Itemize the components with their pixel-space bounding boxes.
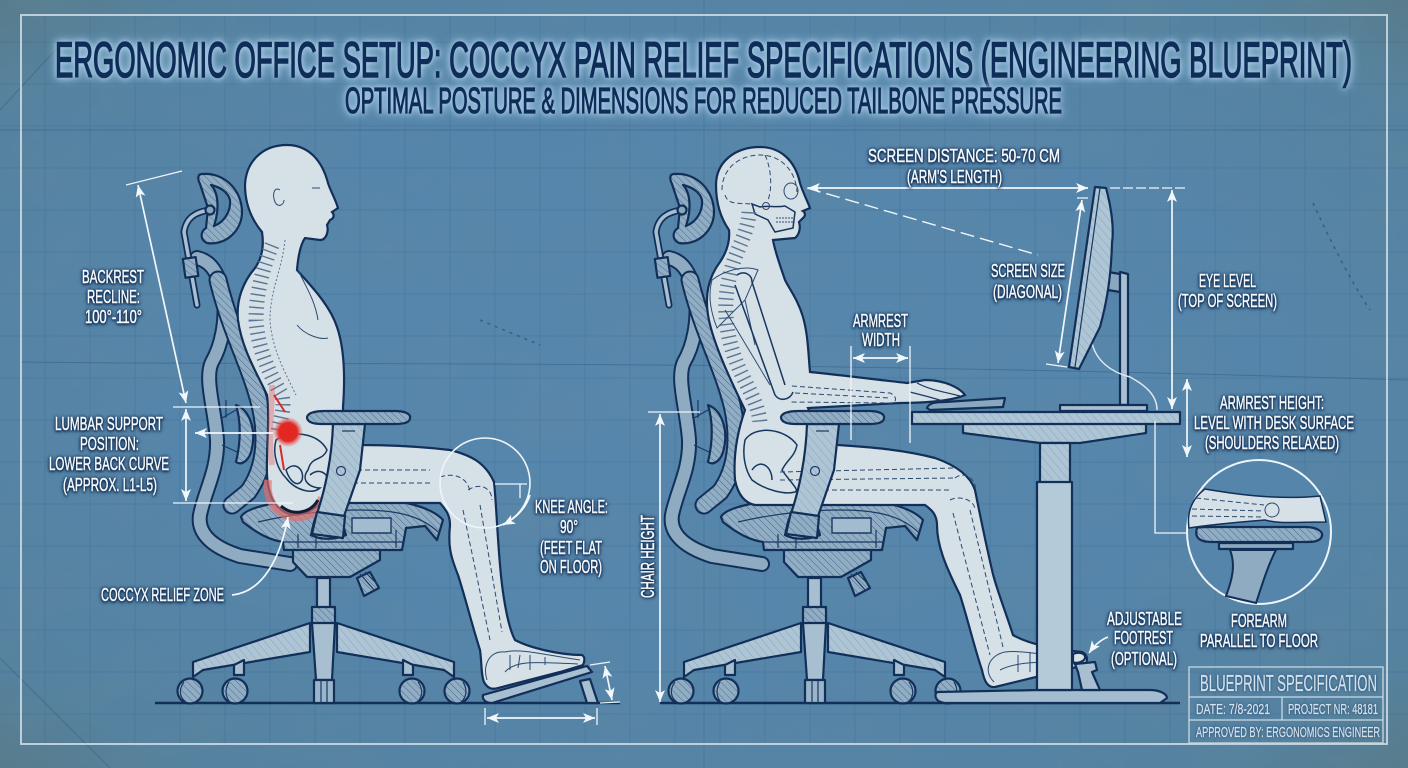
foot bones right [988, 652, 1075, 682]
chair backrest and headrest right [655, 174, 762, 564]
femur lines right [780, 468, 955, 490]
title block: blueprint specification: DATE: 7/8-2021 [1196, 701, 1270, 718]
hand fingers right [910, 383, 960, 402]
body silhouette left [238, 145, 584, 689]
knee and lower leg bones right [950, 475, 1003, 655]
label: screen size: (DIAGONAL) [993, 282, 1062, 302]
chair base left [178, 550, 470, 704]
label: backrest recline: BACKREST [82, 267, 144, 287]
red pain zone left [268, 385, 322, 517]
footrest dimension arrows [485, 662, 620, 725]
label: armrest width: ARMREST [853, 311, 908, 331]
label: lumbar support position: (APPROX. L1-L5) [63, 475, 157, 495]
label: screen distance: (ARM'S LENGTH) [907, 167, 1002, 187]
armrest right [781, 411, 884, 539]
label: forearm parallel: PARALLEL TO FLOOR [1200, 631, 1318, 651]
label: armrest width: WIDTH [862, 330, 900, 350]
label: lumbar support position: LOWER BACK CURVE [49, 454, 169, 474]
lumbar dimension lines [173, 407, 293, 503]
sight line dashed [807, 188, 1038, 255]
body silhouette right [707, 147, 1087, 687]
screen distance arrow [808, 187, 1088, 189]
label: backrest recline: 100°-110° [85, 307, 142, 327]
foot bones left [486, 651, 580, 680]
label: armrest height [1194, 393, 1354, 453]
armrest height arrow [1186, 379, 1188, 457]
chair backrest and headrest left [183, 174, 290, 564]
label: forearm parallel [1200, 611, 1318, 651]
footrest pointer arrow [1089, 637, 1108, 653]
label: chair height: CHAIR HEIGHT [638, 515, 658, 598]
label: armrest width [853, 311, 908, 350]
label: eye level: EYE LEVEL [1199, 271, 1256, 291]
desk top and under-panel [912, 412, 1180, 443]
chair base right [668, 550, 960, 704]
label: lumbar support position: POSITION: [80, 434, 139, 454]
label: adjustable footrest: ADJUSTABLE [1107, 609, 1182, 629]
label: lumbar support position: LUMBAR SUPPORT [55, 414, 163, 434]
label: screen distance [868, 146, 1060, 187]
label: armrest height: ARMREST HEIGHT: [1220, 393, 1324, 413]
label: backrest recline [82, 267, 144, 327]
label: lumbar support position [49, 414, 169, 495]
label: screen size [991, 261, 1065, 302]
armrest width dimension [851, 346, 910, 443]
chair seat left [241, 497, 443, 550]
coccyx pointer arrow [232, 517, 288, 595]
shoulder blade and ribs right [710, 268, 770, 385]
label: knee angle: 90° [560, 517, 578, 537]
connector to forearm detail [1155, 421, 1187, 533]
knee and lower leg bones left [440, 475, 502, 640]
panel: side view posture and chair [49, 145, 620, 725]
label: eye level [1178, 271, 1277, 311]
arm bones right [735, 273, 896, 403]
panel: workstation setup with skeleton [638, 146, 1354, 704]
keyboard [927, 398, 1005, 410]
ear and face details left [274, 188, 328, 338]
label: backrest recline: RECLINE: [87, 287, 140, 307]
eye level dashed reference [1110, 187, 1186, 189]
eye level arrow [1171, 190, 1173, 409]
label: screen distance: SCREEN DISTANCE: 50-70 CM [868, 146, 1060, 166]
label: adjustable footrest: (OPTIONAL) [1111, 649, 1177, 669]
chair seat right [721, 497, 923, 550]
label: coccyx relief zone: COCCYX RELIEF ZONE [101, 585, 224, 605]
armrest left [307, 411, 410, 539]
pelvis and femur left [275, 434, 328, 491]
label: knee angle: (FEET FLAT [540, 538, 602, 558]
forearm detail circle [1187, 460, 1331, 604]
lumbar pointer arrow [195, 432, 273, 434]
skull right [722, 155, 798, 232]
backrest recline dimension arrow [126, 171, 186, 403]
label: knee angle: ON FLOOR) [540, 557, 602, 577]
label: eye level: (TOP OF SCREEN) [1178, 291, 1277, 311]
label: forearm parallel: FOREARM [1231, 611, 1287, 631]
title block: blueprint specification [1189, 667, 1383, 743]
knee angle arrow [503, 495, 530, 525]
label: screen size: SCREEN SIZE [991, 261, 1065, 281]
knee detail circle [440, 438, 530, 528]
label: knee angle [535, 497, 608, 577]
spine left [256, 240, 296, 432]
femur lines left [345, 470, 430, 483]
label: adjustable footrest [1107, 609, 1182, 669]
label: adjustable footrest: FOOTREST [1114, 628, 1173, 648]
floor line left [155, 702, 620, 704]
monitor [1060, 187, 1157, 411]
screen size arrow [1046, 198, 1088, 367]
spine right [726, 212, 760, 425]
floor line right [660, 702, 1180, 704]
label: knee angle: KNEE ANGLE: [535, 497, 608, 517]
chair height dimension [648, 412, 700, 702]
footrest left [483, 666, 598, 703]
pelvis and femur right [744, 430, 797, 493]
desk column and base [936, 443, 1167, 703]
